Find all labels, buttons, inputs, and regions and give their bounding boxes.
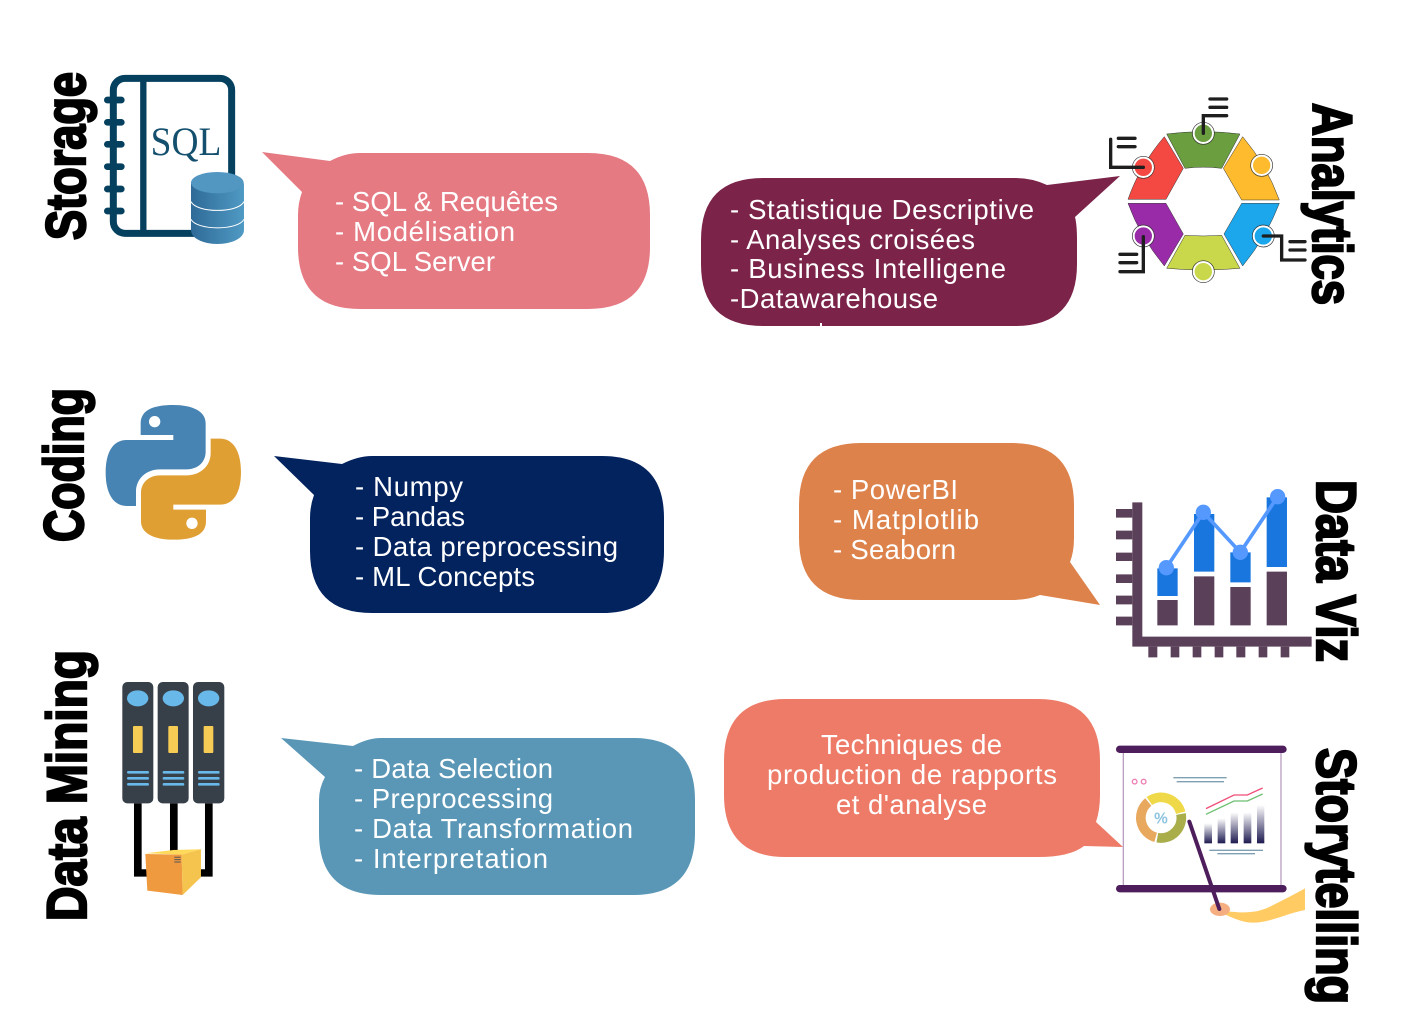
speech bubble: storage: - SQL Server [335,246,495,277]
heading: Coding: Coding [32,388,95,542]
speech bubble: analytics: - Statistique Descriptive [730,194,1034,225]
speech bubble: storytelling [724,699,1123,857]
speech bubble: analytics [701,176,1120,326]
speech bubble: storage: - SQL & Requêtes [335,186,558,217]
speech bubble: coding: - Numpy [355,471,463,502]
speech bubble: storytelling: Techniques de [821,729,1002,760]
icon: servers and box [122,682,224,895]
speech bubble: data mining: - Data Selection [354,753,553,784]
speech bubble: data mining: - Preprocessing [354,783,553,814]
speech bubble: data viz [799,443,1100,605]
heading: Data Viz: Data Viz [1305,480,1368,662]
speech bubble: storage: - Modélisation [335,216,515,247]
icon: presentation board [1120,749,1305,923]
icon: SQL notebook with database [107,78,244,244]
icon: Python logo [106,405,241,540]
heading: Storage: Storage [34,72,97,240]
heading: Analytics: Analytics [1301,103,1364,305]
speech bubble: data mining: - Interpretation [354,843,548,874]
speech bubble: data viz: - Seaborn [833,534,956,565]
speech bubble: data mining: - Data Transformation [354,813,633,844]
icon: data viz bar chart [1116,489,1312,657]
heading: Data Mining: Data Mining [35,650,98,921]
speech bubble: coding: - Data preprocessing [355,531,618,562]
speech bubble: storytelling: et d'analyse [836,789,987,820]
speech bubble: coding [274,456,664,613]
speech bubble: data viz: - PowerBI [833,474,958,505]
speech bubble: analytics: - Business Intelligene [730,253,1006,284]
speech bubble: data mining [281,738,695,895]
speech bubble: analytics: - Analyses croisées [730,224,975,255]
speech bubble: storytelling: production de rapports [767,759,1057,790]
icon: presentation board: % [1154,810,1168,827]
speech bubble: storage [262,152,650,309]
speech bubble: data viz: - Matplotlib [833,504,979,535]
icon: SQL notebook with database: SQL [151,119,221,164]
speech bubble: coding: - Pandas [355,501,465,532]
speech bubble: analytics: -Datawarehouse [730,283,938,314]
speech bubble: coding: - ML Concepts [355,561,535,592]
icon: analytics hexagon ring [1111,99,1305,283]
